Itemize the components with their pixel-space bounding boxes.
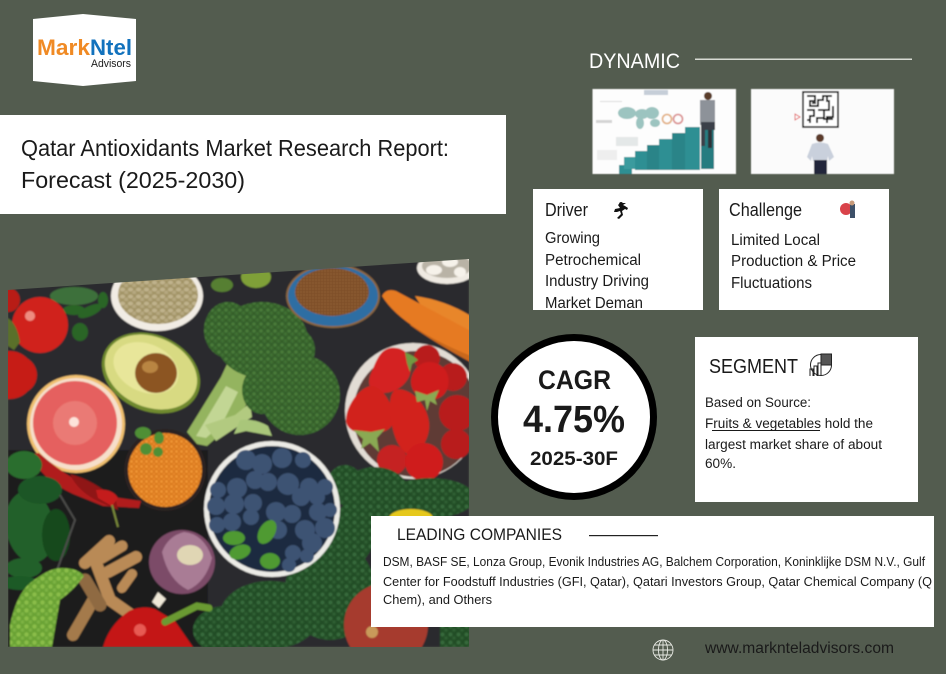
logo	[33, 14, 136, 86]
lentil bowl	[110, 277, 204, 332]
logo: Ntel	[90, 35, 132, 60]
avocado	[100, 332, 202, 414]
company list: Center for Foodstuff Industries (GFI, Qatar), Qatari Investors Group, Qatar Chemical Company (Q	[383, 575, 932, 589]
blueberry bowl	[204, 441, 340, 577]
logo: Mark	[37, 35, 91, 60]
basil leaves	[63, 292, 108, 341]
red pepper	[103, 606, 209, 647]
segment text: 60%.	[705, 456, 736, 471]
lettuce	[10, 568, 84, 647]
segment text: Fruits & vegetables hold the	[705, 416, 873, 431]
garlic	[149, 530, 215, 608]
company list: DSM, BASF SE, Lonza Group, Evonik Industries AG, Balchem Corporation, Koninklijke DSM N.V., Gulf	[383, 555, 926, 569]
kale top left	[50, 287, 98, 305]
grapefruit	[27, 375, 125, 473]
CAGR badge: 4.75%	[523, 399, 625, 441]
image: man facing maze	[751, 89, 894, 174]
tomatoes	[0, 288, 68, 399]
CAGR badge: CAGR	[538, 365, 611, 395]
food photo	[8, 259, 469, 647]
segment text: largest market share of about	[705, 437, 882, 452]
driver heading: Driver	[545, 200, 588, 220]
spinach	[8, 450, 76, 591]
white beans bowl	[416, 259, 469, 286]
challenge text: Fluctuations	[731, 275, 812, 292]
challenge heading: Challenge	[729, 200, 802, 220]
driver text: Petrochemical	[545, 252, 641, 269]
driver text: Industry Driving	[545, 273, 649, 290]
lemon	[388, 508, 434, 516]
segment heading: SEGMENT	[709, 356, 798, 378]
CAGR badge	[494, 338, 654, 496]
segment text	[705, 395, 882, 471]
company list: Chem), and Others	[383, 593, 492, 607]
lentil bowl orange	[124, 429, 206, 511]
website: www.marknteladvisors.com	[704, 640, 894, 657]
pomegranate	[342, 584, 429, 647]
driver text	[545, 230, 649, 312]
kale	[193, 465, 475, 654]
panel: challenge	[719, 189, 889, 310]
title banner	[0, 115, 506, 214]
CAGR badge: 2025-30F	[530, 449, 618, 470]
icon: globe	[653, 640, 673, 660]
panel: leading companies	[371, 516, 934, 627]
panel: segment	[695, 337, 918, 502]
title banner: Qatar Antioxidants Market Research Report:	[21, 135, 449, 161]
icon: pie and bars	[810, 354, 832, 376]
driver text: Market Deman	[545, 295, 643, 312]
icon: runner	[614, 202, 628, 219]
carrots	[382, 290, 472, 363]
title banner: Forecast (2025-2030)	[21, 167, 245, 193]
company list	[383, 555, 932, 607]
basil sprig on lentils	[135, 427, 164, 457]
logo: Advisors	[91, 58, 131, 70]
driver text: Growing	[545, 230, 600, 247]
icon: stop sign person	[840, 200, 855, 218]
strawberry bowl	[345, 343, 481, 481]
challenge text: Limited Local	[731, 232, 820, 249]
challenge text	[731, 232, 856, 292]
image: growth chart with businessman	[592, 89, 736, 174]
challenge text: Production & Price	[731, 253, 856, 270]
segment text: Based on Source:	[705, 395, 811, 410]
leading companies heading: LEADING COMPANIES	[397, 525, 562, 544]
panel: driver	[533, 189, 703, 312]
flax seed bowl	[287, 265, 379, 327]
heading: dynamic: DYNAMIC	[589, 50, 680, 73]
turmeric	[73, 541, 136, 635]
chili peppers	[31, 453, 141, 527]
broccoli	[187, 266, 340, 446]
